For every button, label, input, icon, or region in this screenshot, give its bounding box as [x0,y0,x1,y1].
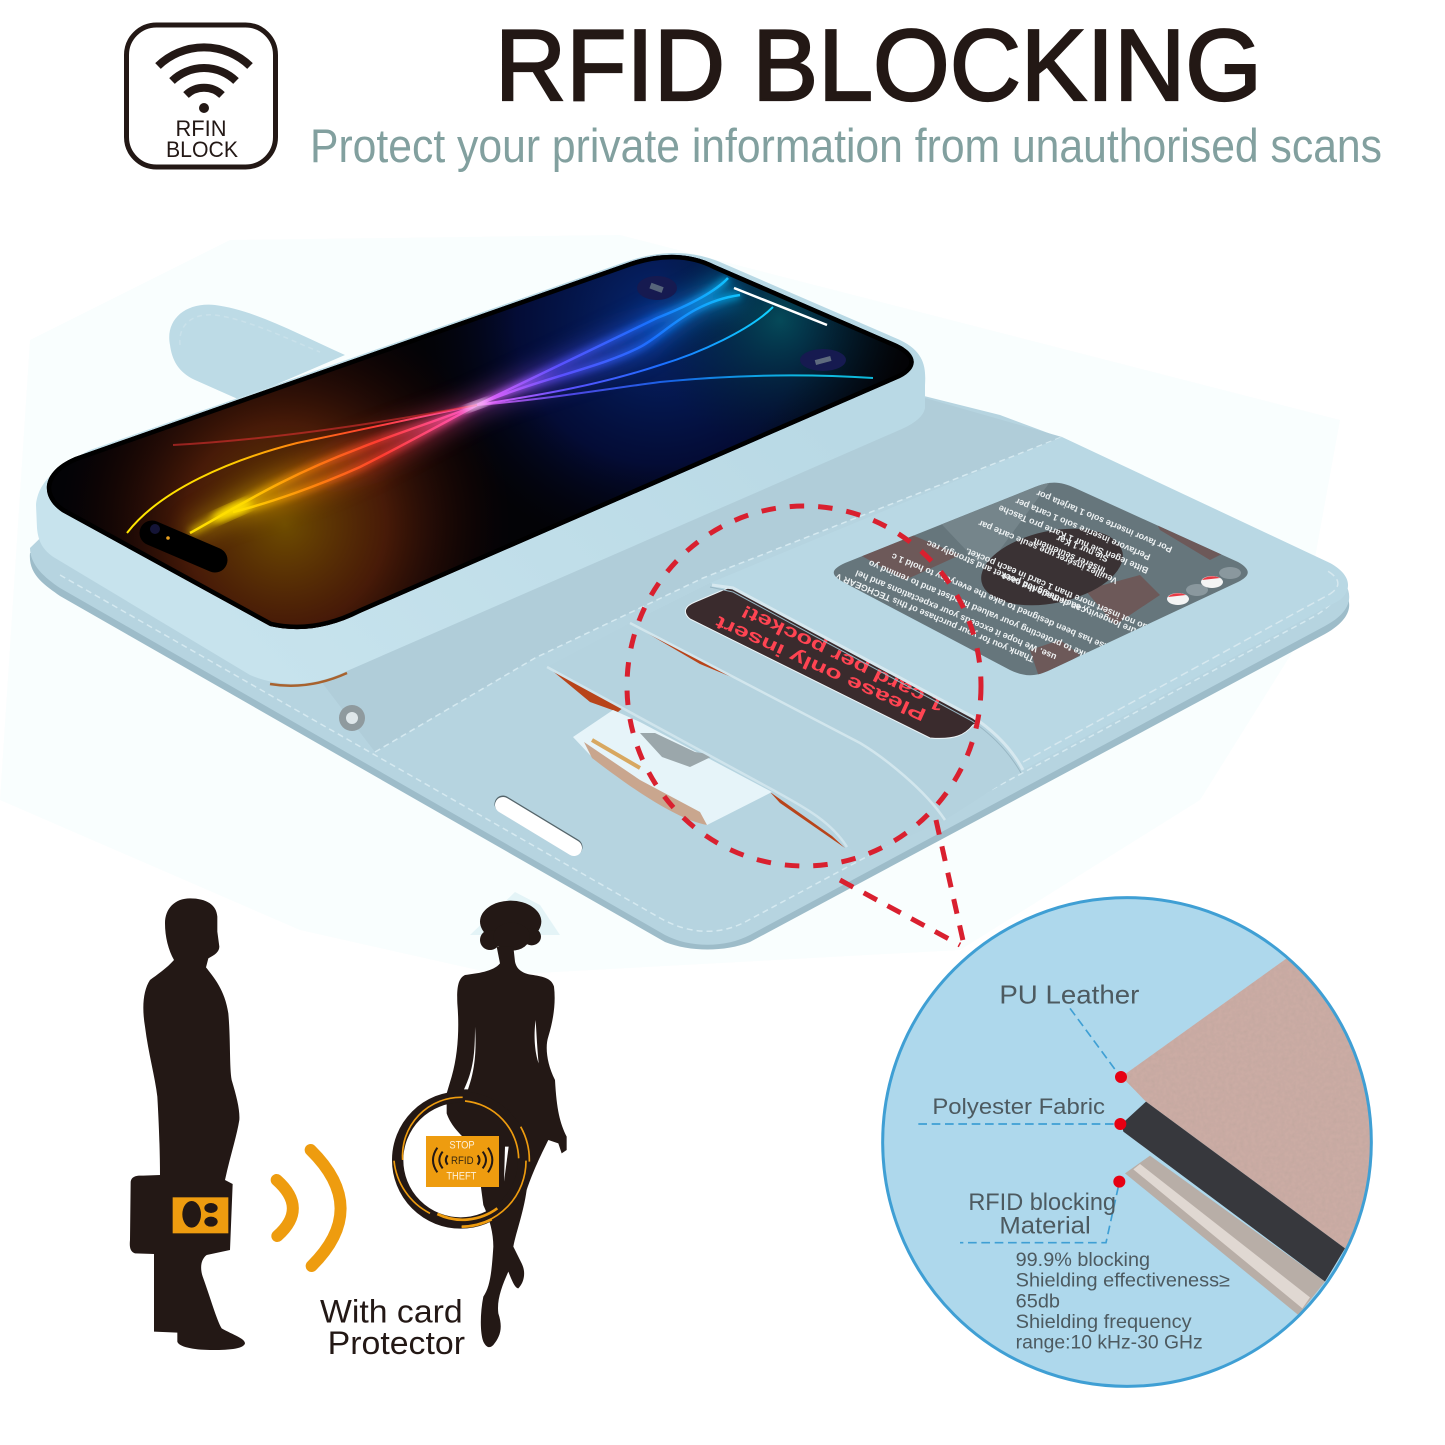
stop RFID theft label [426,1136,499,1187]
silhouette scene [130,898,567,1361]
pocket: middle with card [630,583,1023,820]
RFID specification text: range:10 kHz-30 GHz [1016,1332,1203,1353]
red dashed zoom callout [627,506,981,945]
with card protector caption: Protector [328,1324,465,1361]
phone wallet case product [20,240,1349,950]
eyelet [339,705,365,731]
red markers [1113,1071,1127,1188]
wallet strap [169,305,345,400]
window small print: Por favor inserte solo 1 tarjeta por [1034,488,1174,555]
icon: wifi signal [158,47,250,112]
icon caption: BLOCK [166,137,238,162]
window small print: can damage the case [1000,571,1087,616]
orange edge under case [270,673,347,686]
banknote [573,710,772,825]
window small print: Veuillez insérer une seule carte par [976,518,1119,586]
wallet body [30,395,1349,945]
window small print: Sie nur 1 Kar [1054,533,1110,564]
wallet body edge [30,500,1349,950]
pocket: window panel [710,437,1348,773]
hinge area above stitching [320,398,1062,752]
leader lines [918,1008,1118,1243]
orange lining slots [549,668,845,848]
woman silhouette [447,901,567,1347]
card warning text [712,601,947,725]
stop RFID theft label: THEFT [446,1171,477,1183]
disc outline [883,898,1371,1386]
title: RFID BLOCKING [495,10,1262,122]
window small print: Bitte legen Sie nur 1 Karte pro Tasche [997,503,1150,576]
polyester fabric layer [1122,1102,1345,1282]
card window [834,482,1248,676]
home indicator [734,288,827,325]
layer swatches [1122,958,1390,1315]
light streaks [127,278,873,533]
language flags [1167,567,1241,605]
warning card [685,585,985,738]
icon: orange bag tag [173,1197,228,1233]
screen bezel [47,255,914,629]
bright crossing points [463,397,491,413]
window small print [834,488,1174,672]
RFIN BLOCK icon [126,25,276,167]
magnetic slot [503,804,574,848]
man silhouette with bag [130,898,245,1350]
stop RFID theft label: RFID [451,1155,474,1167]
window small print: To ensure longevity, each designed pocket and strongly rec [925,538,1164,647]
with card protector caption [320,1293,465,1361]
stop RFID theft label: STOP [449,1139,475,1151]
layer labels: Material [999,1212,1091,1239]
phone screen [46,254,914,630]
layer labels [932,979,1140,1239]
with card protector caption: With card [320,1293,463,1330]
soft product backdrop [0,235,1340,975]
window small print: you do not insert more than 1 card in each pocket. [964,546,1166,640]
signal arcs [277,1150,341,1266]
icon caption: RFIN [176,116,226,141]
window small print: use. We hope it exceeds your expectations and hel [854,568,1058,662]
layer labels: Polyester Fabric [932,1094,1105,1119]
card protector ring [394,1097,529,1227]
RFID specification text: Shielding effectiveness≥ [1016,1271,1230,1292]
phone case [36,253,925,684]
RFID specification text [1016,1250,1230,1353]
RFID specification text: Shielding frequency [1016,1312,1192,1333]
card warning text: 1 card per pocket! [738,601,947,716]
material layers disc [883,898,1390,1386]
pocket: front [547,623,945,858]
layer labels: PU Leather [999,979,1140,1009]
window small print: Perfavore inserire solo 1 carta per [1013,496,1152,562]
lock screen shortcut icons [637,276,846,371]
window small print: insérer seulement [1032,536,1107,575]
RFID specification text: 99.9% blocking [1016,1250,1150,1271]
stitching [60,437,1337,931]
icon caption [166,116,238,162]
RFID specification text: 65db [1016,1291,1060,1312]
wallet reflection behind figure [470,892,560,935]
window small print: would like to protecting your valued handset and to remind yo [866,558,1117,672]
layer labels: RFID blocking [968,1189,1116,1216]
card warning text: Please only insert [712,612,929,725]
faint red streak [173,405,477,445]
orange slit and spare card [635,626,770,693]
PU leather layer [1126,958,1370,1248]
window small print: Thank you for your purchase of this TECHGEAR V [834,571,1036,664]
dynamic island [150,524,215,560]
RFID blocking layer [1125,1156,1325,1315]
window small print: This case has been designed to take the everyday to hold 1 c [890,551,1134,662]
